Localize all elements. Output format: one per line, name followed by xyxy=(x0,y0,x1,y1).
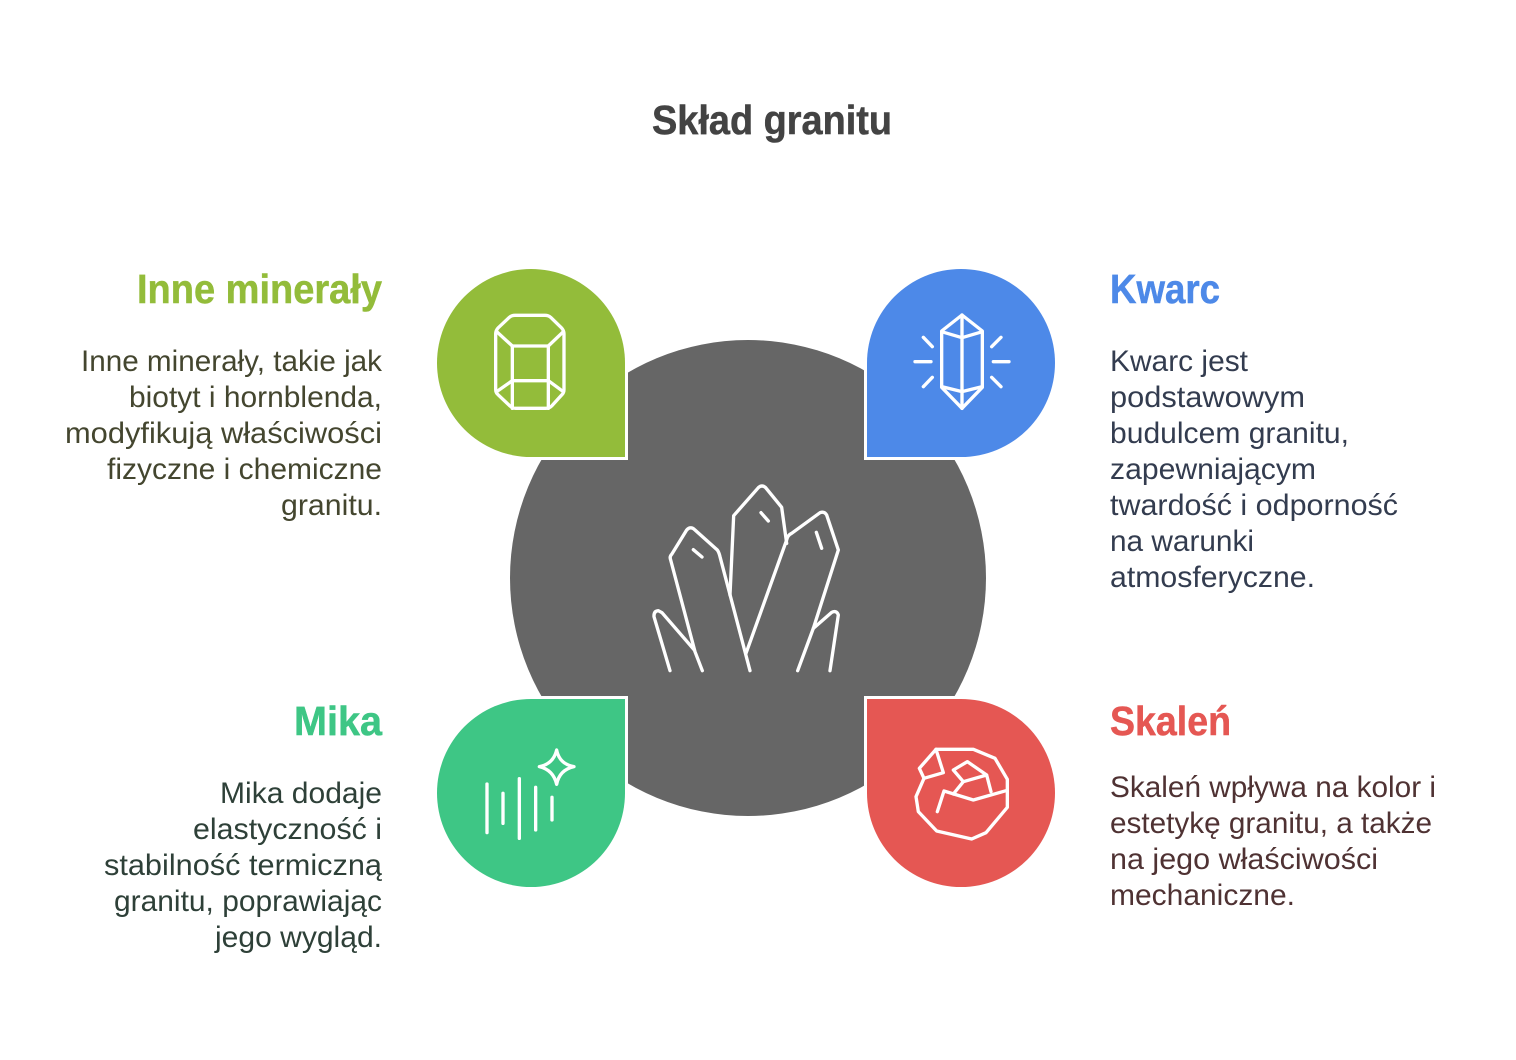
icon: feldspar rock xyxy=(916,749,1007,839)
central grey circle with crystal cluster xyxy=(510,340,986,816)
text block: Skaleń: estetykę granitu, a także xyxy=(1110,807,1432,840)
text block: Inne minerały: granitu. xyxy=(281,489,382,522)
text block: Inne minerały xyxy=(65,345,383,522)
text block: Mika: elastyczność i xyxy=(193,813,382,846)
title: Skład granitu xyxy=(652,97,892,143)
text block: Mika: jego wygląd. xyxy=(214,921,382,954)
icon: quartz crystal with rays xyxy=(915,315,1009,408)
text block: Skaleń: mechaniczne. xyxy=(1110,879,1295,912)
text block: Inne minerały: Inne minerały, takie jak xyxy=(81,345,383,378)
text block: Kwarc: twardość i odporność xyxy=(1110,489,1398,522)
text block: Mika xyxy=(104,777,382,954)
text block: Kwarc: atmosferyczne. xyxy=(1110,561,1315,594)
icon: crystal cluster xyxy=(654,486,838,671)
text block: Kwarc: na warunki xyxy=(1110,525,1254,558)
text block: Skaleń: na jego właściwości xyxy=(1110,843,1378,876)
heading: Kwarc: Kwarc xyxy=(1110,266,1220,312)
text block: Skaleń: Skaleń wpływa na kolor i xyxy=(1110,771,1436,804)
text block: Kwarc: podstawowym xyxy=(1110,381,1305,414)
text block: Kwarc xyxy=(1110,345,1398,594)
heading: Mika: Mika xyxy=(294,698,383,744)
text block: Kwarc: Kwarc jest xyxy=(1110,345,1249,378)
panel: Kwarc teardrop xyxy=(867,269,1055,457)
panel: Skaleń teardrop xyxy=(867,699,1055,887)
text block: Inne minerały: modyfikują właściwości xyxy=(65,417,382,450)
panel: Mika teardrop xyxy=(437,699,625,887)
icon: mica lines and sparkle xyxy=(487,750,574,838)
panel: Inne minerały teardrop xyxy=(437,269,625,457)
text block: Inne minerały: biotyt i hornblenda, xyxy=(129,381,382,414)
text block: Mika: stabilność termiczną xyxy=(104,849,382,882)
text block: Skaleń xyxy=(1110,771,1436,912)
heading: Inne minerały: Inne minerały xyxy=(137,266,382,312)
icon: prism crystal xyxy=(496,315,564,408)
text block: Inne minerały: fizyczne i chemiczne xyxy=(107,453,382,486)
text block: Kwarc: budulcem granitu, xyxy=(1110,417,1349,450)
text block: Mika: Mika dodaje xyxy=(220,777,382,810)
text block: Mika: granitu, poprawiając xyxy=(114,885,382,918)
text block: Kwarc: zapewniającym xyxy=(1110,453,1316,486)
heading: Skaleń: Skaleń xyxy=(1110,698,1231,744)
